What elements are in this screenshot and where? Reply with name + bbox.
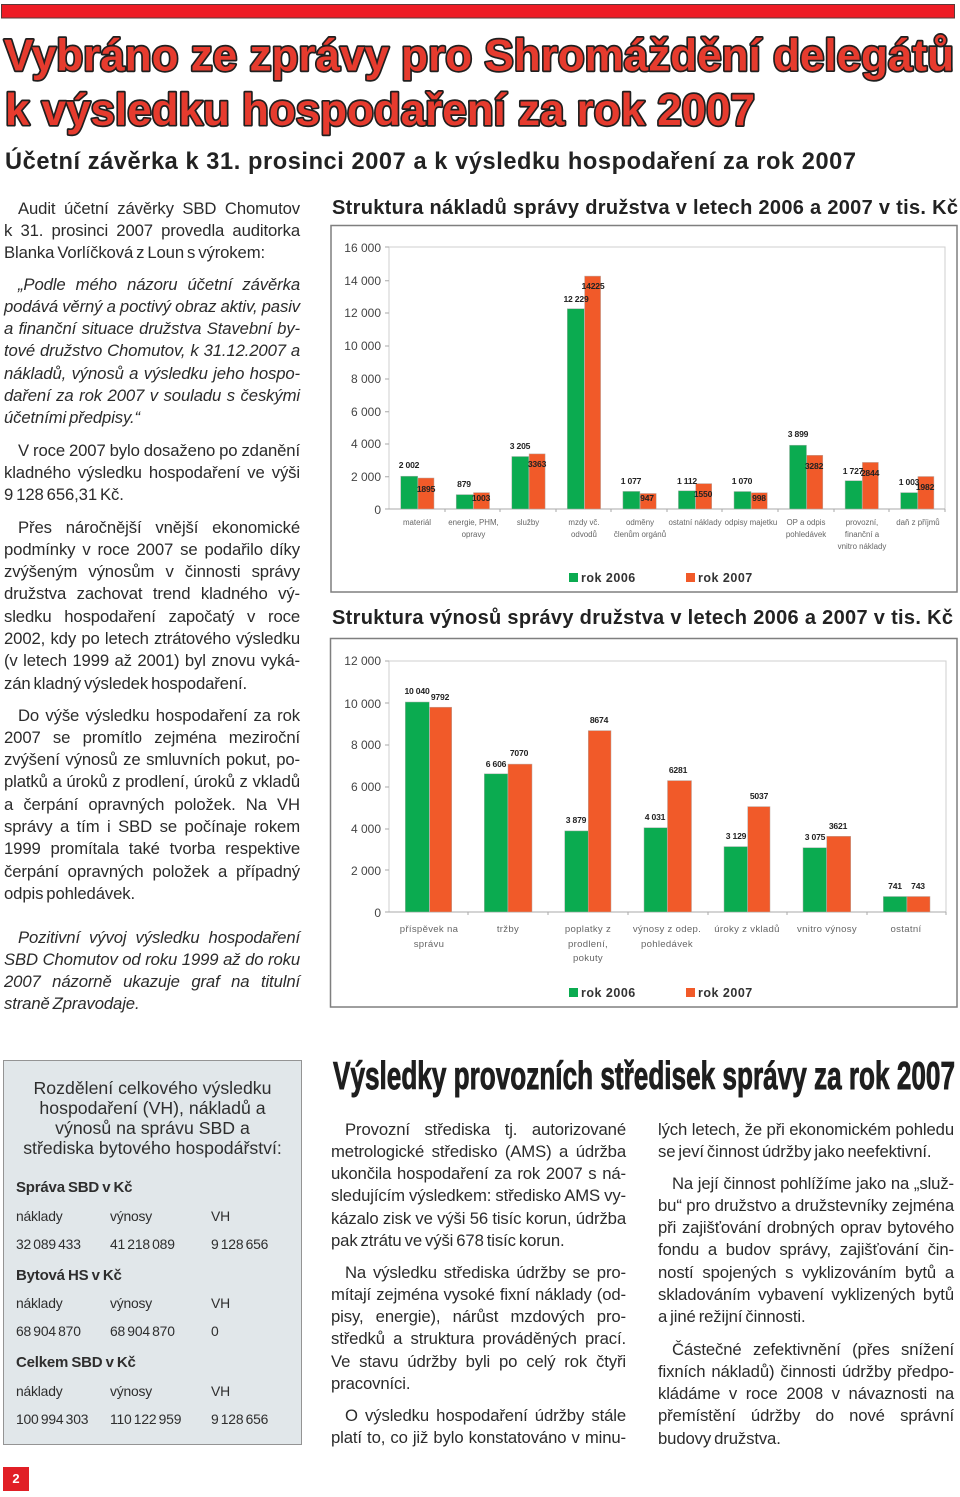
panel heading: střediska bytového hospodářství:	[23, 1138, 282, 1158]
table: Celkem SBD: 100 994 303	[16, 1410, 88, 1426]
table: Správa SBD: 9 128 656	[211, 1236, 268, 1252]
value labels: 743	[911, 881, 925, 891]
text: external conditions: podmínky v roce 2007 se podařilo díky	[4, 540, 300, 559]
text: external conditions: (v letech 1999 až 2001) byl znovu vyká-	[4, 651, 300, 670]
value labels: 3 129	[726, 831, 747, 841]
text: external conditions: sledku hospodaření započatý v roce	[4, 607, 300, 626]
category labels: úroky z vkladů	[714, 924, 780, 935]
text: positive trend note	[4, 928, 302, 1013]
paragraph: metrologické středisko (AMS) a údržba	[331, 1142, 626, 1161]
value labels: 1 077	[621, 476, 642, 486]
table: Celkem SBD: výnosy	[110, 1382, 152, 1398]
text: positive trend note: straně Zpravodaje.	[4, 994, 139, 1013]
value labels: 741	[888, 881, 902, 891]
text: auditor quote: tové družstvo Chomutov, k 31.12.2007 a	[4, 341, 300, 360]
value labels: 3621	[829, 821, 848, 831]
value labels: 2844	[861, 468, 880, 478]
bars 2006	[401, 309, 918, 509]
text: audit intro: k 31. prosinci 2007 provedla auditorka	[4, 221, 300, 240]
y axis labels: 14 000	[344, 274, 381, 288]
text column: operating centres left	[331, 1120, 626, 1447]
category labels: tržby	[497, 924, 519, 935]
subtitle: Účetní závěrka k 31. prosinci 2007 a k výsledku hospodaření za rok 2007	[5, 147, 856, 175]
chart: cost structure	[331, 226, 957, 592]
category labels: opravy	[462, 530, 485, 539]
category labels: ostatní	[891, 924, 921, 935]
text: auditor quote: daření za rok 2007 v souladu s českými	[4, 386, 300, 405]
table: Bytová HS: Bytová HS v Kč	[16, 1266, 122, 1284]
legend	[569, 571, 753, 585]
value labels	[399, 281, 935, 503]
y axis labels: 4 000	[351, 437, 381, 451]
table: Správa SBD: výnosy	[110, 1208, 152, 1224]
paragraph: platí to, co již bylo konstatováno v minu-	[331, 1428, 626, 1447]
category labels: poplatky z	[565, 924, 611, 935]
panel: distribution of result	[3, 1060, 302, 1445]
text: result 2007	[4, 440, 300, 504]
text: external conditions: zvýšeným výnosům v činnosti správy	[4, 562, 300, 581]
y axis labels: 8 000	[351, 372, 381, 386]
paragraph	[331, 1120, 626, 1250]
paragraph: sledujícím výsledkem: středisko AMS vy-	[331, 1186, 626, 1205]
y axis labels: 2 000	[351, 864, 381, 878]
value labels: 12 229	[563, 294, 589, 304]
value labels: 4 031	[645, 812, 666, 822]
table: Bytová HS: náklady	[16, 1294, 62, 1310]
text: positive trend note: 2007 názorně ukazuje graf na titulní	[4, 972, 300, 991]
paragraph: ností spojených s vyklizováním bytů a	[658, 1263, 954, 1282]
category labels: odvodů	[571, 530, 597, 539]
table: Správa SBD: náklady	[16, 1208, 62, 1224]
value labels: 14225	[582, 281, 605, 291]
paragraph: budovy družstva.	[658, 1429, 781, 1448]
paragraph: kládáme v roce 2008 v návaznosti na	[658, 1384, 954, 1403]
paragraph: Částečné zefektivnění (přes snížení	[672, 1340, 954, 1358]
table: Celkem SBD: 110 122 959	[110, 1410, 181, 1426]
text: revenue drivers: správy a tím i SBD se počínaje rokem	[4, 817, 300, 836]
text: external conditions: 2002, kdy po letech ztrátového výsledku	[4, 629, 300, 648]
text: result 2007: kladného výsledku hospodaření ve výši	[4, 463, 300, 482]
paragraph	[331, 1406, 626, 1447]
table: Správa SBD	[16, 1178, 268, 1252]
value labels: 1 003	[899, 477, 920, 487]
paragraph	[658, 1120, 954, 1161]
heading: cost structure chart: Struktura nákladů správy družstva v letech 2006 a 2007 v tis. Kč	[332, 197, 958, 219]
paragraph	[331, 1262, 626, 1393]
y axis labels: 8 000	[351, 738, 381, 752]
table: Bytová HS	[16, 1266, 230, 1338]
value labels: 3 879	[566, 815, 587, 825]
value labels: 7070	[510, 748, 529, 758]
category labels: materiál	[403, 518, 431, 527]
category labels: vnitro výnosy	[797, 924, 857, 935]
paragraph: O výsledku hospodaření údržby stále	[345, 1406, 626, 1424]
text: audit intro: Blanka Vorlíčková z Loun s výrokem:	[4, 243, 265, 262]
text: revenue drivers: platků a úroků z prodlení, úroků z vkladů	[4, 772, 300, 791]
table: Správa SBD: VH	[211, 1208, 230, 1224]
text: external conditions: zán kladný výsledek hospodaření.	[4, 674, 247, 693]
category labels: ostatní náklady	[668, 518, 722, 527]
category labels: členům orgánů	[614, 530, 666, 539]
text: result 2007: V roce 2007 bylo dosaženo po zdanění	[18, 440, 300, 460]
category labels: služby	[517, 518, 539, 527]
legend: rok 2006	[581, 571, 636, 585]
page number	[3, 1467, 29, 1491]
y axis labels: 4 000	[351, 822, 381, 836]
text: revenue drivers: 1999 promítala také tvorba respektive	[4, 839, 300, 858]
text: auditor quote	[4, 274, 301, 427]
category labels: pohledávek	[641, 939, 693, 950]
value labels: 3 075	[805, 832, 826, 842]
text: external conditions: Přes náročnější vnější ekonomické	[18, 518, 300, 536]
y axis labels: 6 000	[351, 405, 381, 419]
paragraph: ukončila hospodaření za rok 2007 s ná-	[331, 1164, 626, 1183]
y axis labels	[344, 241, 381, 517]
paragraph: mítají zejména vysoké fixní náklady (od-	[331, 1285, 626, 1304]
table: Celkem SBD: VH	[211, 1382, 230, 1398]
text: audit intro: Audit účetní závěrky SBD Chomutov	[18, 198, 300, 218]
table: Správa SBD: Správa SBD v Kč	[16, 1178, 132, 1196]
category labels: finanční a	[845, 530, 880, 539]
value labels: 1 070	[732, 476, 753, 486]
text: external conditions	[4, 518, 300, 693]
y axis labels	[344, 654, 381, 920]
bars 2006	[405, 702, 907, 912]
category labels: výnosy z odep.	[633, 924, 701, 935]
category labels: odpisy majetku	[725, 518, 777, 527]
text: positive trend note: Pozitivní vývoj výsledku hospodaření	[18, 928, 300, 946]
value labels: 1 112	[677, 476, 697, 486]
category labels: pokuty	[573, 953, 603, 964]
text: external conditions: družstva zachovat trend kladného vý-	[4, 584, 300, 603]
text: auditor quote: podává věrný a poctivý obraz aktiv, pasiv	[4, 297, 300, 316]
value labels: 3282	[805, 461, 824, 471]
y axis labels: 6 000	[351, 780, 381, 794]
value labels: 3363	[528, 459, 547, 469]
table: Bytová HS: výnosy	[110, 1294, 152, 1310]
text: revenue drivers: odpis pohledávek.	[4, 884, 135, 903]
legend	[569, 986, 753, 1000]
bars 2007	[430, 707, 930, 912]
text: revenue drivers	[4, 706, 300, 903]
paragraph: kázalo zisk ve výši 56 tisíc korun, údržba	[331, 1209, 626, 1228]
bars 2007	[418, 276, 934, 509]
value labels: 10 040	[404, 686, 430, 696]
value labels	[404, 686, 925, 891]
paragraph: se jeví činnost údržby jako neefektivní.	[658, 1142, 931, 1161]
paragraph	[658, 1340, 954, 1448]
value labels: 1895	[417, 484, 436, 494]
text: auditor quote: účetními předpisy.“	[4, 408, 140, 427]
table: Celkem SBD: náklady	[16, 1382, 62, 1398]
value labels: 947	[640, 493, 654, 503]
table: Bytová HS: 68 904 870	[110, 1322, 175, 1338]
y axis labels: 2 000	[351, 470, 381, 484]
text: revenue drivers: zvýšení výnosů ze smluvních pokut, po-	[4, 750, 300, 769]
paragraph: Provozní střediska tj. autorizované	[345, 1120, 626, 1138]
text: revenue drivers: a čerpání opravných položek. Na VH	[4, 795, 300, 814]
value labels: 3 205	[510, 441, 531, 451]
category labels: provozní,	[846, 518, 878, 527]
panel heading: Rozdělení celkového výsledku	[34, 1078, 271, 1098]
category labels: odměny	[626, 518, 654, 527]
category labels: prodlení,	[568, 939, 608, 950]
top red bar	[2, 4, 954, 18]
paragraph: lých letech, že při ekonomickém pohledu	[658, 1120, 954, 1138]
title	[4, 32, 954, 135]
paragraph: fondu a budov správy, zajišťování čin-	[658, 1240, 954, 1259]
table: Celkem SBD	[16, 1354, 268, 1426]
table: Bytová HS: 68 904 870	[16, 1322, 81, 1338]
panel heading: hospodaření (VH), nákladů a	[39, 1098, 266, 1118]
legend: rok 2007	[698, 571, 753, 585]
paragraph: skladováním vybavení vyklizených bytů	[658, 1285, 954, 1304]
text: auditor quote: a finanční situace družstva Stavební by-	[4, 319, 300, 338]
legend: rok 2007	[698, 986, 753, 1000]
category labels: příspěvek na	[400, 924, 459, 935]
table: Celkem SBD: 9 128 656	[211, 1410, 268, 1426]
paragraph: při zajišťování drobných oprav bytového	[658, 1218, 954, 1237]
value labels: 879	[457, 479, 471, 489]
y axis labels: 16 000	[344, 241, 381, 255]
paragraph: přemístění údržby do nové správní	[658, 1406, 954, 1425]
text: auditor quote: „Podle mého názoru účetní závěrka	[18, 274, 300, 294]
legend: rok 2006	[581, 986, 636, 1000]
title: Vybráno ze zprávy pro Shromáždění delegátů	[4, 32, 954, 80]
paragraph: fixních nákladů) činnosti údržby předpo-	[658, 1362, 954, 1381]
category labels: energie, PHM,	[448, 518, 499, 527]
y axis labels: 10 000	[344, 339, 381, 353]
text: auditor quote: nákladů, výnosů a výsledku jeho hospo-	[4, 364, 300, 383]
category labels: mzdy vč.	[568, 518, 600, 527]
category labels: daň z příjmů	[896, 518, 940, 527]
paragraph: pisy, energie), nárůst mzdových pro-	[331, 1307, 626, 1326]
text: positive trend note: SBD Chomutov od roku 1999 až do roku	[4, 950, 300, 969]
chart: revenue structure	[330, 638, 957, 1007]
table: Bytová HS: 0	[211, 1322, 219, 1338]
value labels: 6281	[669, 765, 688, 775]
heading: revenue structure chart: Struktura výnosů správy družstva v letech 2006 a 2007 v tis. Kč	[332, 607, 953, 629]
paragraph: Na výsledku střediska údržby se pro-	[345, 1262, 626, 1282]
paragraph: středků a struktura prováděných prací.	[331, 1329, 626, 1348]
table: Bytová HS: VH	[211, 1294, 230, 1310]
y axis labels: 12 000	[344, 306, 381, 320]
y axis labels: 10 000	[344, 697, 381, 711]
value labels: 1003	[472, 493, 491, 503]
table: Správa SBD: 41 218 089	[110, 1236, 175, 1252]
value labels: 6 606	[486, 759, 507, 769]
title: k výsledku hospodaření za rok 2007	[5, 86, 755, 135]
paragraph: a jiné režijní činnosti.	[658, 1307, 806, 1326]
paragraph	[658, 1174, 954, 1326]
text column: operating centres right	[658, 1120, 954, 1448]
category labels	[400, 924, 921, 964]
category labels	[403, 518, 940, 551]
text: audit intro	[4, 198, 300, 262]
paragraph: bu“ pro družstvo a družstevníky zejména	[658, 1196, 954, 1215]
category labels: OP a odpis	[787, 518, 825, 527]
paragraph: Na její činnost pohlížíme jako na „služ-	[672, 1174, 954, 1192]
value labels: 1982	[916, 482, 935, 492]
value labels: 8674	[590, 715, 609, 725]
y axis labels: 0	[374, 906, 381, 920]
text: result 2007: 9 128 656,31 Kč.	[4, 485, 124, 504]
table: Celkem SBD: Celkem SBD v Kč	[16, 1354, 136, 1370]
value labels: 1550	[694, 489, 713, 499]
panel heading: výnosů na správu SBD a	[55, 1118, 250, 1138]
paragraph: Ve stavu údržby byli po celý rok čtyři	[331, 1352, 626, 1371]
value labels: 998	[752, 493, 766, 503]
table: Správa SBD: 32 089 433	[16, 1236, 81, 1252]
paragraph: pracovníci.	[331, 1374, 410, 1393]
text: revenue drivers: čerpání opravných položek a případný	[4, 862, 300, 881]
category labels: vnitro náklady	[838, 542, 886, 551]
y axis labels: 0	[374, 503, 381, 517]
y axis labels: 12 000	[344, 654, 381, 668]
value labels: 3 899	[788, 429, 809, 439]
category labels: pohledávek	[786, 530, 826, 539]
panel heading	[23, 1078, 282, 1158]
value labels: 5037	[750, 791, 769, 801]
value labels: 9792	[431, 692, 450, 702]
value labels: 1 727	[843, 466, 864, 476]
text: revenue drivers: 2007 se promítlo zejména meziroční	[4, 728, 300, 747]
value labels: 2 002	[399, 460, 420, 470]
paragraph: pak ztrátu ve výši 678 tisíc korun.	[331, 1231, 565, 1250]
text: revenue drivers: Do výše výsledku hospodaření za rok	[18, 706, 300, 724]
page number: 2	[12, 1471, 20, 1486]
category labels: správu	[414, 939, 444, 950]
